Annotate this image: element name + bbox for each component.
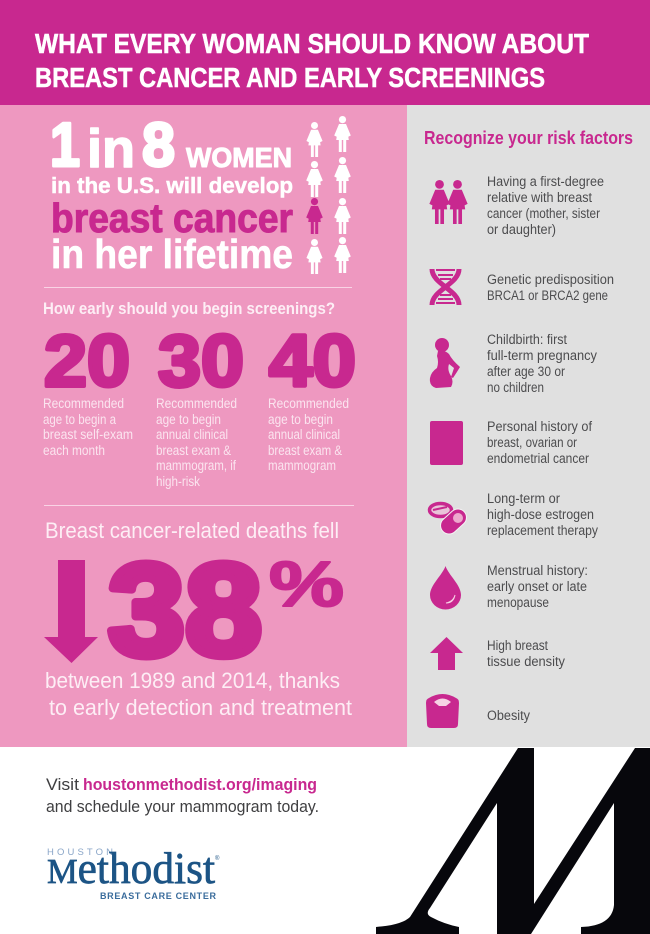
column: age 20: each month — [43, 443, 105, 458]
arrow: down — [44, 560, 98, 663]
panel: risk factors — [407, 105, 650, 747]
text: time period — [45, 668, 352, 720]
column: age 40: 40 — [269, 321, 356, 402]
text: genetic predisposition: BRCA1 or BRCA2 gene — [487, 288, 608, 303]
icon: up arrow — [430, 637, 463, 670]
icon: pills — [430, 504, 470, 538]
text: genetic predisposition: Genetic predisposition — [487, 272, 614, 287]
column: age 30: age to begin — [156, 412, 221, 427]
column: age 40: age to begin — [268, 412, 333, 427]
headline: 1 in 8 women — [50, 111, 293, 277]
text: first-degree relative: cancer (mother, sister — [487, 206, 600, 221]
text: personal history: endometrial cancer — [487, 451, 589, 466]
headline: 1 in 8 women: in her lifetime — [51, 231, 293, 277]
column: age 40: breast exam & — [268, 443, 342, 458]
text: estrogen therapy: Long-term or — [487, 491, 560, 506]
text: first-degree relative: Having a first-degree — [487, 174, 604, 189]
icon: rectangle — [430, 421, 463, 465]
column: age 30: breast exam & — [156, 443, 231, 458]
text: breast density: High breast — [487, 638, 548, 653]
text: childbirth: Childbirth: first — [487, 332, 567, 347]
column: age 30: annual clinical — [156, 427, 228, 442]
headline: 1 in 8 women: in the U.S. will develop — [51, 173, 293, 198]
text: menstrual history: early onset or late — [487, 579, 587, 594]
text: breast density — [487, 638, 565, 669]
column: age 30 — [156, 321, 244, 489]
text: breast density: tissue density — [487, 654, 565, 669]
text: first-degree relative: or daughter) — [487, 222, 556, 237]
text: menstrual history — [487, 563, 588, 610]
header band — [0, 0, 650, 105]
text: genetic predisposition — [487, 272, 614, 303]
column: age 40: Recommended — [268, 396, 349, 411]
headline: 1 in 8 women: breast cancer — [51, 195, 293, 241]
statistic: 38 percent: % — [269, 548, 344, 620]
text: deaths fell: Breast cancer-related deaths fell — [45, 518, 339, 543]
icons: eight women, one highlighted — [306, 116, 351, 274]
text: childbirth: after age 30 or — [487, 364, 565, 379]
text: personal history: breast, ovarian or — [487, 435, 577, 450]
call to action: houstonmethodist.org/imaging — [83, 775, 317, 794]
text: childbirth — [487, 332, 597, 395]
column: age 30: mammogram, if — [156, 458, 236, 473]
text: estrogen therapy: high-dose estrogen — [487, 507, 594, 522]
statistic: 38 percent — [108, 536, 344, 683]
text: time period: between 1989 and 2014, thanks — [45, 668, 340, 693]
headline: 1 in 8 women: 1 — [50, 111, 80, 180]
column: age 20 — [43, 321, 133, 458]
headline: 1 in 8 women: 8 — [142, 111, 175, 180]
column: age 30: 30 — [158, 321, 244, 402]
logo: Houston Methodist: Methodist — [47, 844, 215, 893]
text: estrogen therapy — [487, 491, 598, 538]
text: menstrual history: Menstrual history: — [487, 563, 588, 578]
call to action: and schedule your mammogram today. — [46, 797, 319, 816]
text: estrogen therapy: replacement therapy — [487, 523, 598, 538]
logo: Houston Methodist: BREAST CARE CENTER — [100, 891, 216, 901]
title: WHAT EVERY WOMAN SHOULD KNOW ABOUT — [35, 28, 589, 59]
panel: statistics — [0, 105, 407, 747]
column: age 40: annual clinical — [268, 427, 340, 442]
text: menstrual history: menopause — [487, 595, 549, 610]
column: age 20: 20 — [44, 321, 130, 402]
statistic: 38 percent: 38 — [108, 536, 262, 683]
column: age 40: mammogram — [268, 458, 336, 473]
column: age 20: age to begin a — [43, 412, 116, 427]
text: childbirth: no children — [487, 380, 544, 395]
text: obesity: Obesity — [487, 708, 530, 723]
column: age 20: Recommended — [43, 396, 124, 411]
headline: 1 in 8 women: in — [87, 119, 135, 179]
text: personal history — [487, 419, 592, 466]
text: first-degree relative — [487, 174, 604, 237]
column: age 30: Recommended — [156, 396, 237, 411]
call to action — [46, 775, 319, 816]
icon: DNA — [432, 269, 459, 305]
icon: pregnant woman — [430, 338, 460, 388]
column: age 40 — [268, 321, 356, 473]
icon: drop — [430, 566, 461, 610]
text: time period: to early detection and treatment — [49, 695, 352, 720]
subheading: screenings: How early should you begin screenings? — [43, 299, 335, 318]
column: age 20: breast self-exam — [43, 427, 133, 442]
headline: 1 in 8 women: WOMEN — [186, 142, 292, 173]
logo: Houston Methodist: HOUSTON — [47, 847, 113, 858]
text: childbirth: full-term pregnancy — [487, 348, 597, 363]
text: personal history: Personal history of — [487, 419, 592, 434]
icon: two women — [429, 180, 468, 224]
text: first-degree relative: relative with breast — [487, 190, 592, 205]
title — [35, 28, 589, 93]
column: age 30: high-risk — [156, 474, 200, 489]
logo: Houston Methodist: ® — [215, 855, 220, 862]
icon: scale — [426, 694, 459, 728]
title: BREAST CANCER AND EARLY SCREENINGS — [35, 62, 545, 93]
call to action: Visit — [46, 775, 79, 794]
logo: large M monogram — [376, 748, 650, 934]
